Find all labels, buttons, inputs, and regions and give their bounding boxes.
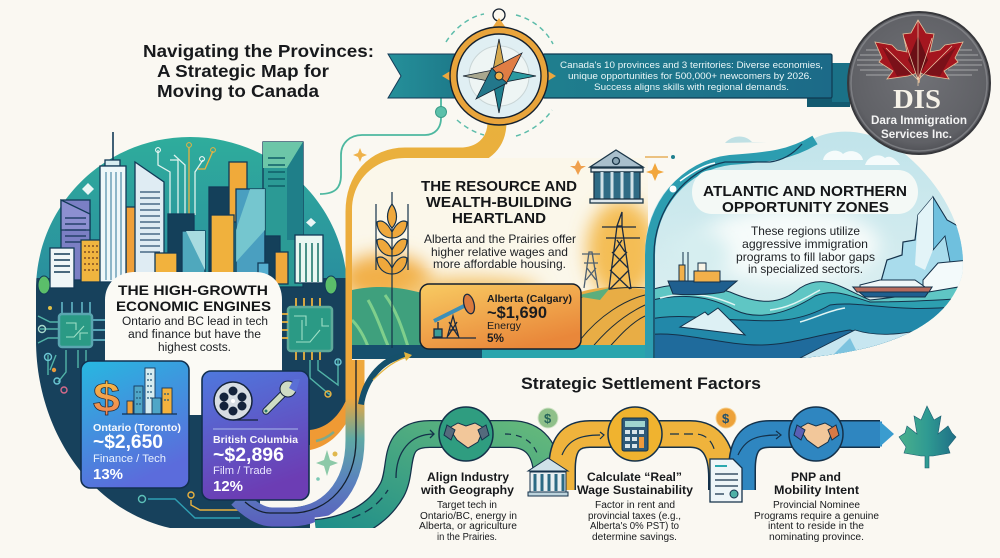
step 1 text: Alberta, or agriculture (419, 521, 517, 532)
icon: bank (590, 150, 643, 203)
logo: Dara Immigration (871, 113, 967, 127)
circuit board (38, 302, 341, 518)
heading: OPPORTUNITY ZONES (722, 199, 889, 216)
icon: coin green: $ (544, 411, 552, 426)
trees (38, 276, 337, 294)
sparkle (353, 148, 367, 162)
icon: red maple leaf (875, 20, 963, 86)
step 3 text: PNP and (791, 470, 841, 484)
green fields (352, 287, 421, 345)
ribbon: right with intro text: Success aligns skills with regional demands. (594, 82, 789, 93)
title: A Strategic Map for (157, 61, 329, 81)
main road (238, 122, 497, 517)
blue road with arrowhead (738, 422, 894, 490)
step 3 text (754, 470, 879, 543)
description: aggressive immigration (742, 237, 868, 251)
heading: HEARTLAND (452, 211, 546, 227)
sparkles (316, 450, 338, 481)
ribbon: left (388, 54, 456, 98)
icon: coin green (538, 408, 558, 428)
icon: coin orange (716, 408, 736, 428)
icon: coin orange: $ (722, 411, 730, 426)
card: Ontario (81, 361, 189, 488)
icon: dollar and skyline: $ (93, 374, 120, 421)
heading: ECONOMIC ENGINES (116, 298, 271, 314)
card: British Columbia: British Columbia (213, 434, 298, 446)
description: These regions utilize (751, 224, 860, 238)
step 2 text: determine savings. (592, 532, 677, 543)
logo (848, 12, 990, 154)
description: in specialized sectors. (748, 262, 863, 276)
icon: power pylons (582, 212, 640, 289)
panel: resource and wealth-building heartland (340, 150, 675, 405)
step 3 text: intent to reside in the (768, 521, 864, 532)
icon: step 1 handshake (439, 407, 493, 461)
heading: THE RESOURCE AND (421, 179, 577, 195)
description: programs to fill labor gaps (736, 250, 875, 264)
card: Ontario: Ontario (Toronto) (93, 422, 181, 434)
description (122, 316, 268, 354)
ribbon: right with intro text: Canada's 10 provinces and 3 territories: Diverse economies, (560, 60, 823, 71)
title: Navigating the Provinces: (143, 41, 374, 61)
description (424, 232, 576, 271)
card: British Columbia: ~$2,896 (213, 445, 284, 466)
description: highest costs. (158, 342, 231, 354)
small arrow (373, 352, 412, 380)
card: Ontario: Finance / Tech (93, 453, 166, 465)
ribbon: right with intro text (543, 54, 852, 107)
settlement pathway (316, 406, 956, 533)
ribbon: right with intro text: unique opportunities for 500,000+ newcomers by 2026. (568, 71, 812, 82)
card: Ontario: 13% (93, 466, 123, 483)
description: higher relative wages and (431, 245, 568, 259)
card: Alberta: Energy (487, 320, 522, 332)
card: British Columbia: 12% (213, 478, 243, 495)
icon: wheat (376, 192, 408, 348)
step 2 text: Alberta's 0% PST) to (590, 521, 679, 532)
card: Alberta: Alberta (Calgary) (487, 293, 572, 305)
icon: film reel and wrench (214, 379, 300, 420)
city skyline dome (30, 130, 350, 533)
step 3 text: Mobility Intent (774, 483, 859, 497)
clouds (725, 136, 900, 165)
card: Ontario: ~$2,650 (93, 432, 163, 453)
icon: green maple leaf (899, 406, 956, 468)
step 1 text: in the Prairies. (437, 532, 497, 543)
step 2 text: provincial taxes (e.g., (588, 511, 681, 522)
waves (645, 282, 970, 360)
step 1 text (419, 470, 517, 543)
logo: DIS (893, 84, 941, 114)
card: Alberta: 5% (487, 333, 504, 345)
chip right (280, 298, 332, 360)
orange road (562, 432, 722, 490)
icon: right ship (853, 280, 932, 297)
green road (316, 430, 547, 533)
yellow fields (580, 287, 645, 345)
ice floes (680, 308, 745, 335)
heading: THE HIGH-GROWTH (118, 282, 268, 298)
heading: WEALTH-BUILDING (426, 195, 572, 211)
heading (692, 170, 918, 216)
chip left (59, 314, 92, 347)
step 1 text: Ontario/BC, energy in (420, 511, 517, 522)
heading: strategic settlement factors: Strategic Settlement Factors (521, 375, 761, 393)
iceberg (880, 197, 965, 290)
icon: step 3 handshake (789, 407, 843, 461)
heading: ATLANTIC AND NORTHERN (703, 183, 907, 200)
step 2 text: Calculate “Real” (587, 470, 682, 484)
orange ribbon detail (310, 398, 347, 450)
description: Alberta and the Prairies offer (424, 232, 576, 246)
panel: high-growth economic engines (30, 122, 497, 533)
buildings (50, 132, 323, 288)
icon: step 2 calculator (608, 407, 662, 461)
step 3 text: nominating province. (769, 532, 864, 543)
step 2 text: Wage Sustainability (577, 483, 693, 497)
icon: left ship (668, 252, 737, 295)
step 3 text: Programs require a genuine (754, 511, 879, 522)
step 1 text: with Geography (420, 483, 514, 497)
icon: compass (442, 9, 556, 136)
card: Alberta (420, 284, 581, 349)
pocket inside the road (260, 445, 347, 508)
white text panel (105, 272, 282, 415)
step 1 text: Align Industry (427, 470, 509, 484)
card: Alberta: ~$1,690 (487, 303, 547, 322)
icon: oil pump (432, 293, 476, 338)
title: Moving to Canada (157, 81, 319, 101)
heading (116, 282, 271, 314)
description: Ontario and BC lead in tech (122, 316, 268, 328)
step 1 text: Target tech in (437, 500, 497, 511)
logo: Services Inc. (881, 127, 952, 141)
icon: document (710, 459, 742, 502)
panel: atlantic and northern opportunity zones (640, 125, 970, 365)
route line to compass (320, 98, 446, 194)
description: more affordable housing. (433, 257, 566, 271)
description (736, 224, 875, 276)
step 2 text: Factor in rent and (595, 500, 675, 511)
step 2 text (577, 470, 693, 543)
card: British Columbia: Film / Trade (213, 465, 272, 477)
heading (421, 179, 577, 227)
step 3 text: Provincial Nominee (773, 500, 860, 511)
card: British Columbia (202, 371, 309, 500)
icon: bank (528, 458, 568, 496)
description: and finance but have the (128, 329, 261, 341)
teal road border (650, 140, 815, 358)
title (143, 41, 374, 101)
